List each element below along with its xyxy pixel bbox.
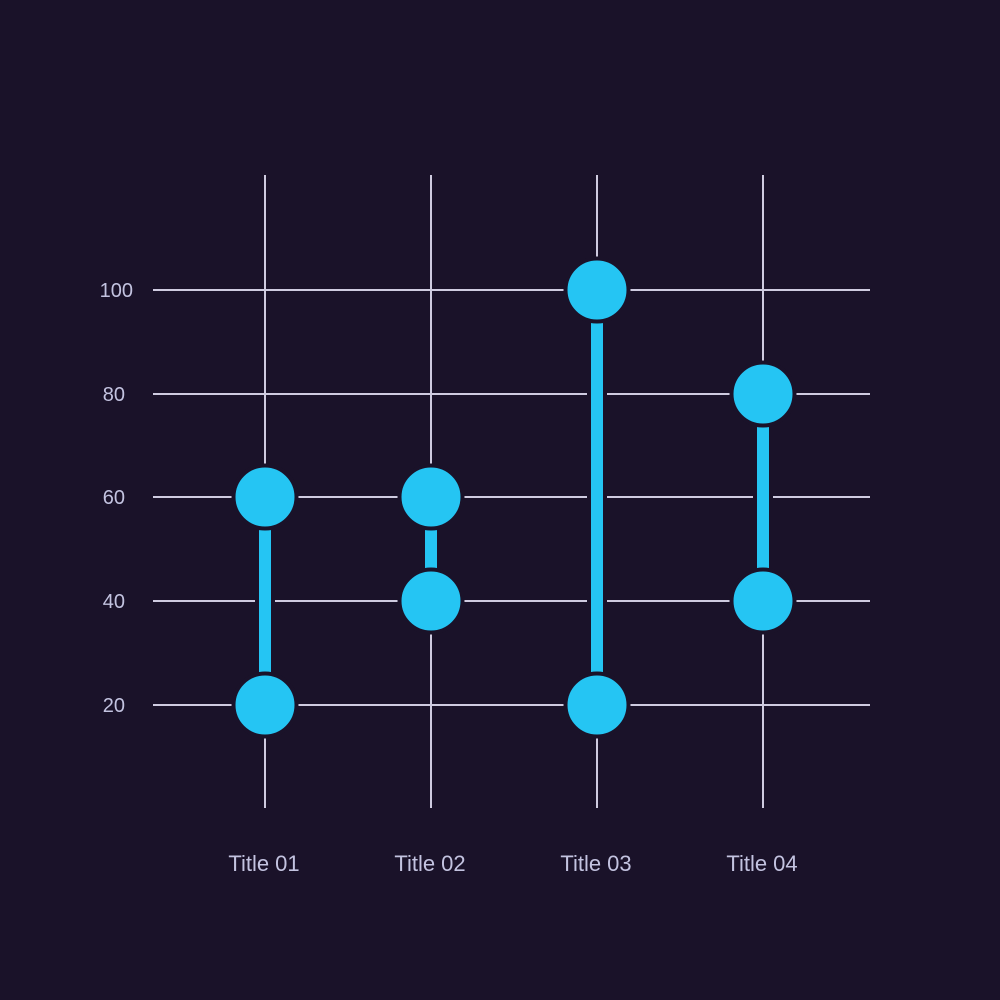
y axis labels: 80 [103,384,125,406]
x axis labels: Title 02 [394,851,466,876]
y axis labels: 20 [103,695,125,717]
y axis labels: 100 [100,280,133,302]
series: Title 02 (40-60) [400,466,462,632]
y axis labels [100,280,133,717]
x axis labels [228,851,798,876]
x axis labels: Title 01 [228,851,300,876]
x axis labels: Title 04 [726,851,798,876]
series: Title 04 (40-80) [732,362,794,632]
y axis labels: 40 [103,591,125,613]
series: Title 03 (20-100) [566,258,628,736]
y axis labels: 60 [103,487,125,509]
series: Title 01 (20-60) [234,466,296,736]
x axis labels: Title 03 [560,851,632,876]
